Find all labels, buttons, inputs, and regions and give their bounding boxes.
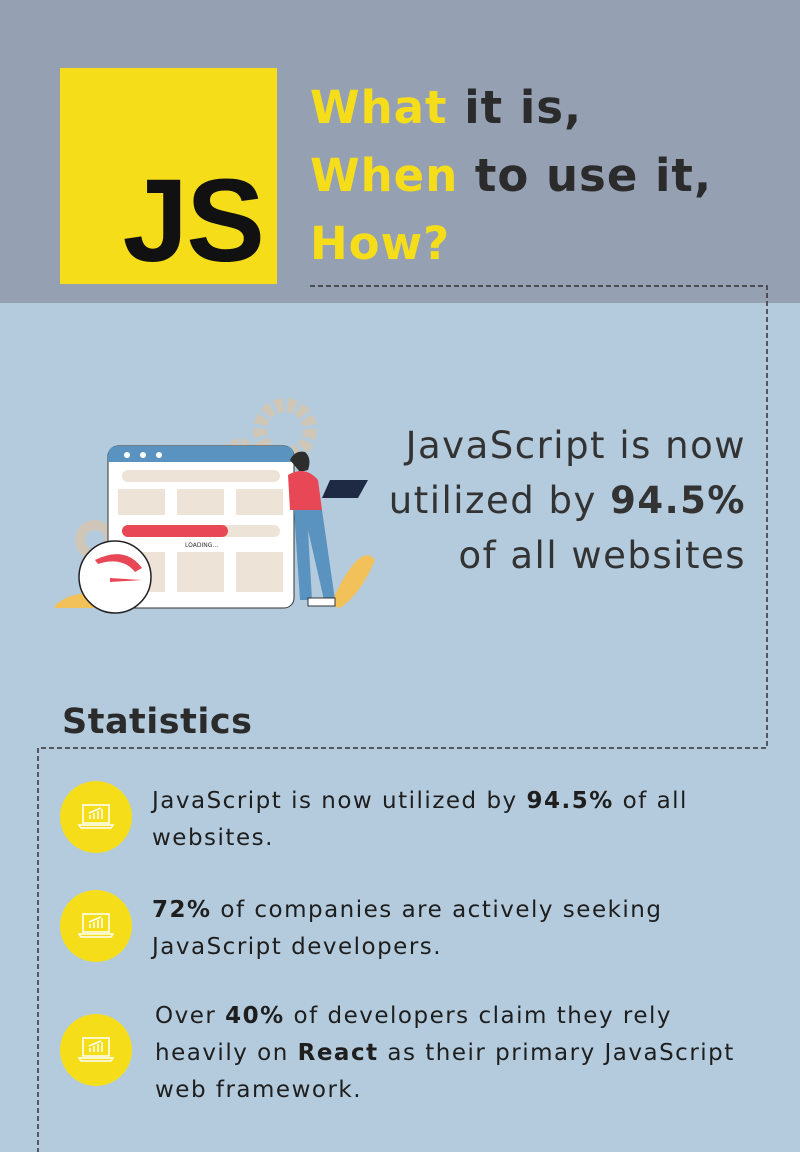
text: JavaScript is now utilized by 94.5% of all [152, 788, 688, 814]
headline stat: utilized by 94.5% [389, 479, 746, 522]
title [310, 81, 712, 270]
header band [0, 0, 800, 303]
text [150, 788, 688, 851]
icon: laptop chart [60, 781, 132, 853]
text: JavaScript developers. [152, 934, 442, 960]
illustration: loading webpage with developer [55, 398, 375, 614]
illustration: loading webpage with developer: LOADING... [185, 542, 218, 549]
logo: JS: JS [123, 155, 263, 287]
stat item 2 [60, 890, 662, 962]
title: What it is, [310, 81, 582, 134]
stat item 3 [60, 1003, 735, 1103]
headline stat: JavaScript is now [406, 424, 746, 467]
text: websites. [152, 825, 274, 851]
headline stat: of all websites [458, 534, 746, 577]
logo: JS [60, 68, 277, 284]
text: 72% of companies are actively seeking [152, 897, 662, 923]
text [150, 897, 662, 960]
text: web framework. [155, 1077, 362, 1103]
title: When to use it, [310, 149, 712, 202]
headline stat [389, 424, 746, 577]
icon: laptop chart [60, 890, 132, 962]
title: How? [310, 217, 450, 270]
text: Over 40% of developers claim they rely [155, 1003, 672, 1029]
text [155, 1003, 735, 1103]
heading: Statistics: Statistics [62, 702, 252, 742]
icon: laptop chart [60, 1014, 132, 1086]
text: heavily on React as their primary JavaScript [155, 1040, 735, 1066]
stat item 1 [60, 781, 688, 853]
